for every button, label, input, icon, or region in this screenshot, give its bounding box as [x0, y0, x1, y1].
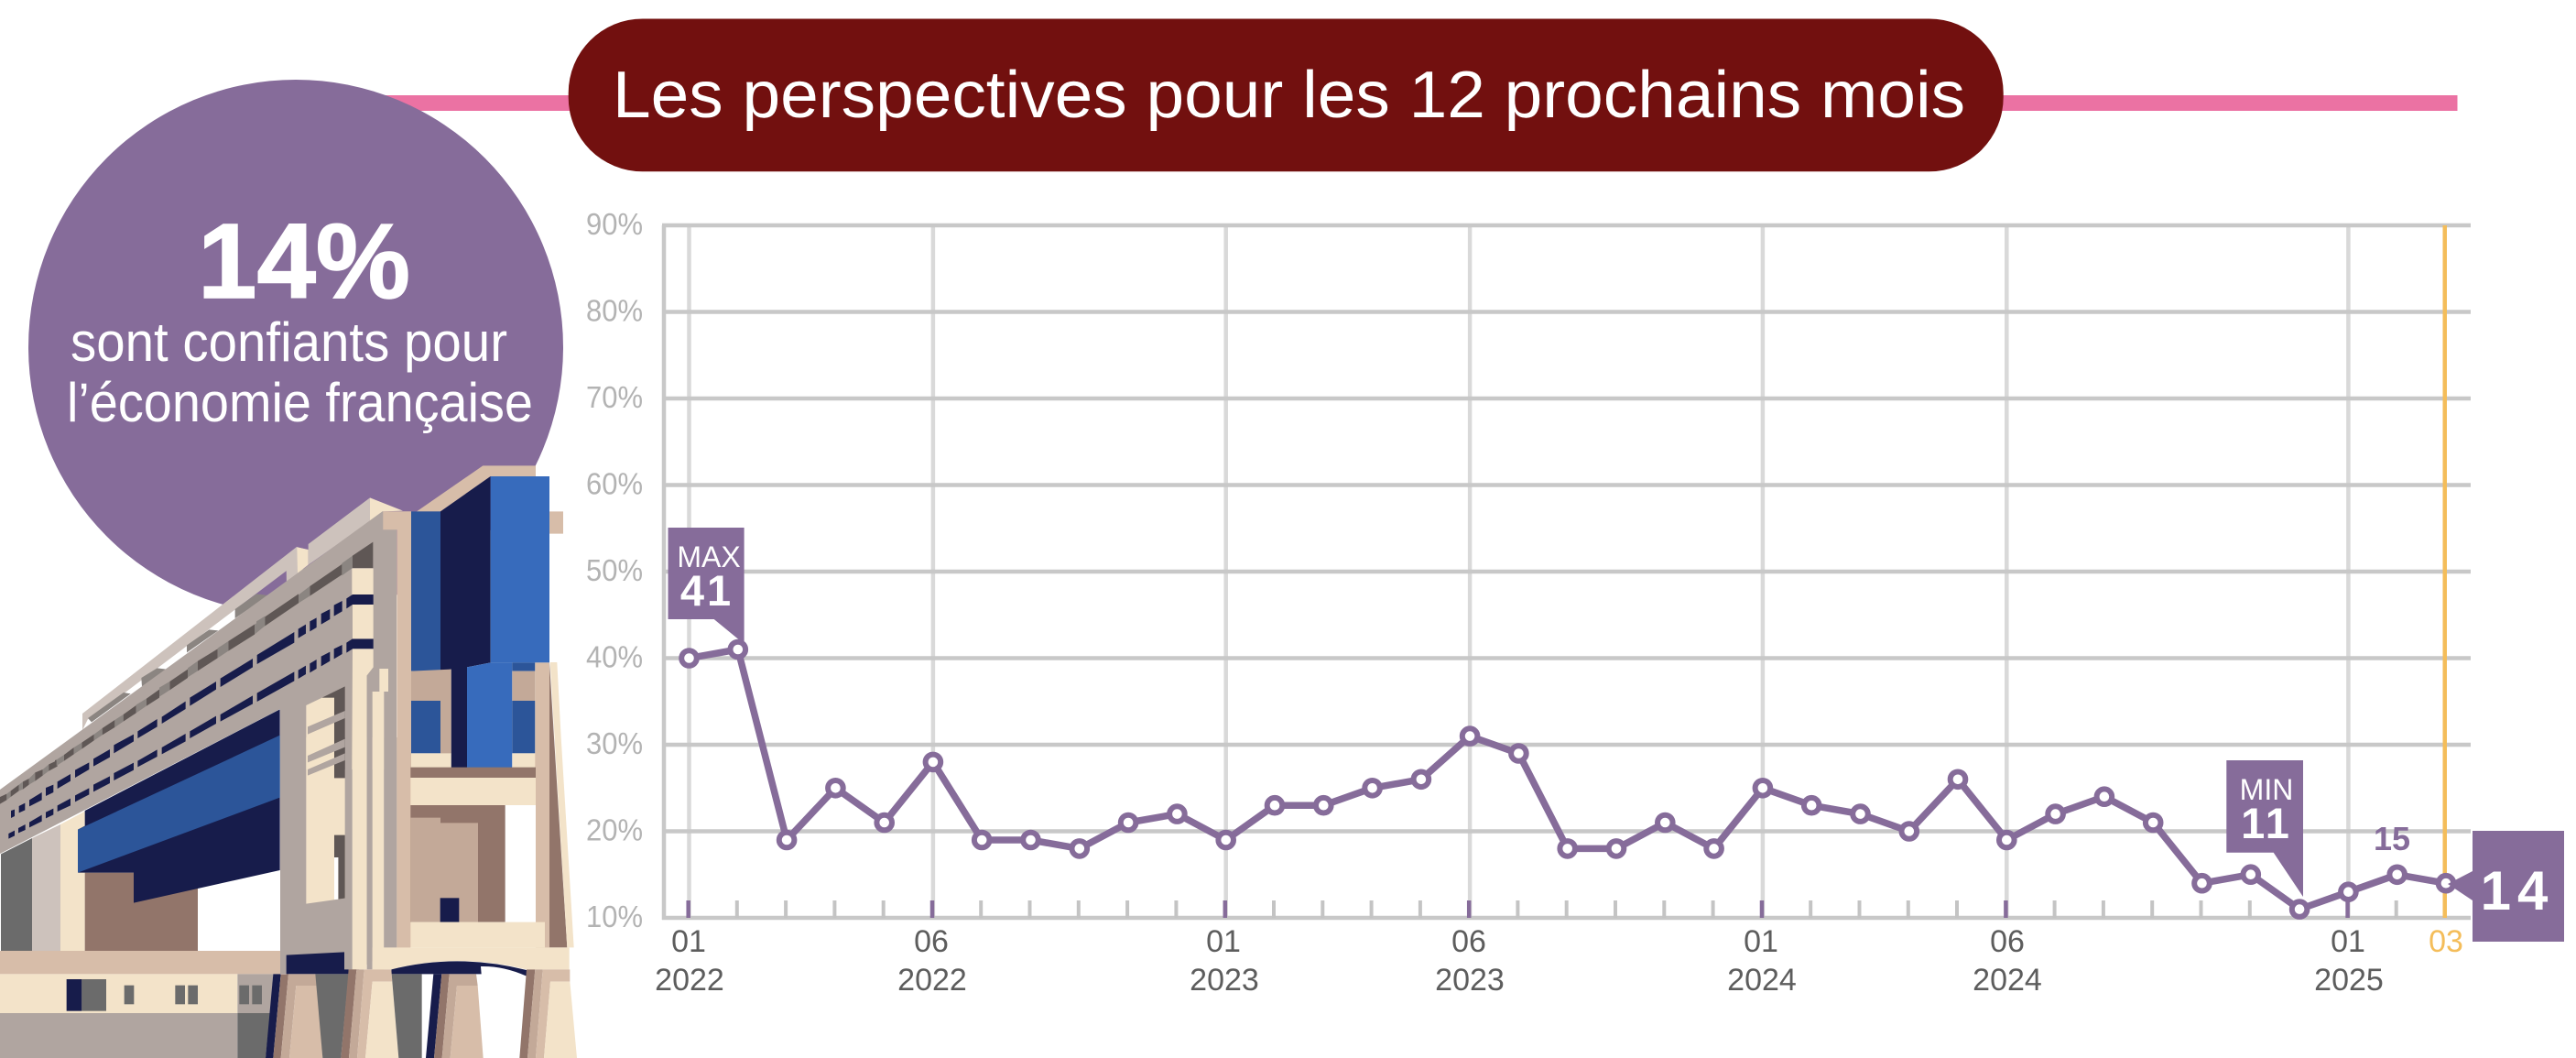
x axis labels: 06	[914, 924, 949, 959]
line chart	[586, 207, 2564, 998]
building: lower left columns and blue glazing	[0, 709, 280, 1058]
data point markers	[681, 650, 2453, 900]
x axis labels: 06	[1451, 924, 1486, 959]
big number 14%: 14%	[198, 202, 410, 321]
building: roof rail and rear structure	[82, 465, 563, 730]
callout: maximum 41: 41	[680, 566, 734, 615]
chart grid	[662, 225, 2471, 920]
x axis labels: 01	[2331, 924, 2365, 959]
title band: pink rule	[366, 95, 2458, 111]
y axis labels: 40%	[586, 639, 643, 674]
callout: minimum 11: MIN	[2240, 773, 2293, 806]
title text: Les perspectives pour les 12 prochains mois	[613, 59, 1965, 132]
x axis labels: 03	[2429, 924, 2463, 959]
y axis labels: 90%	[586, 207, 643, 241]
y axis labels: 50%	[586, 553, 643, 587]
caption: sont confiants pour	[71, 311, 507, 373]
y axis labels	[586, 207, 643, 933]
x axis labels: 2025	[2314, 963, 2384, 998]
building: main facade	[0, 511, 411, 974]
x axis labels: 2022	[897, 963, 967, 998]
x axis labels: 2024	[1973, 963, 2042, 998]
y axis labels: 30%	[586, 726, 643, 760]
current month marker line	[2443, 225, 2447, 918]
callout: latest value 14: 14	[2481, 860, 2554, 922]
y axis labels: 20%	[586, 813, 643, 846]
x axis labels: 2023	[1435, 963, 1505, 998]
data label 15: 15	[2374, 820, 2410, 857]
y axis labels: 60%	[586, 467, 643, 500]
x axis labels: 2024	[1727, 963, 1797, 998]
callout: minimum 11	[2226, 760, 2307, 917]
x axis labels: 2022	[655, 963, 724, 998]
x axis labels: 06	[1990, 924, 2025, 959]
y axis labels: 80%	[586, 293, 643, 328]
callout: maximum 41	[668, 528, 745, 657]
data line	[689, 649, 2446, 910]
x axis labels	[655, 924, 2463, 998]
callout: minimum 11: 11	[2241, 799, 2292, 847]
x axis labels: 2023	[1190, 963, 1259, 998]
caption: l’économie française	[67, 372, 533, 433]
title pill	[569, 18, 2004, 171]
y axis labels: 10%	[586, 900, 643, 933]
x axis labels: 01	[671, 924, 706, 959]
building: lower right structure, bridge and legs	[266, 662, 577, 1058]
y axis labels: 70%	[586, 380, 643, 414]
caption	[67, 311, 533, 433]
building: facade strip and windows	[55, 617, 266, 812]
building: upper right tower	[256, 476, 549, 769]
panel: key figure circle	[28, 80, 563, 615]
callout: maximum 41: MAX	[677, 540, 741, 573]
icon: Bercy ministry building	[0, 465, 577, 1058]
x axis labels: 01	[1744, 924, 1778, 959]
callout: latest value 14	[2448, 831, 2564, 942]
x axis labels: 01	[1206, 924, 1241, 959]
